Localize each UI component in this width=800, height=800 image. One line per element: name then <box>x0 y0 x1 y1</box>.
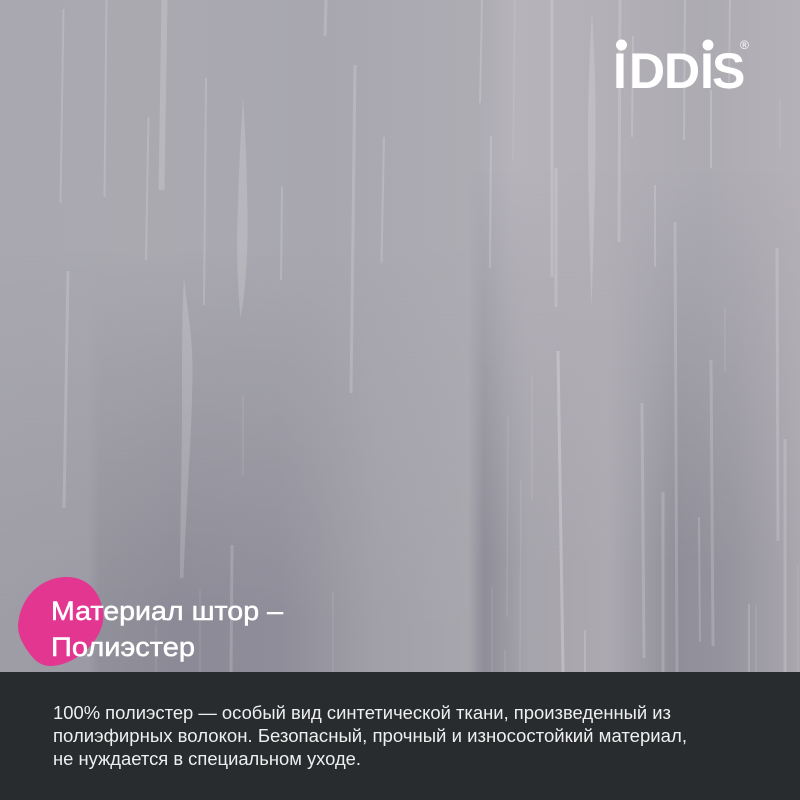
heading: Материал штор – <box>51 596 283 626</box>
description text: 100% полиэстер — особый вид синтетической ткани, произведенный из <box>53 703 671 723</box>
description text: полиэфирных волокон. Безопасный, прочный и износостойкий материал, <box>53 726 687 746</box>
logo wordmark: IDDIS <box>613 43 745 99</box>
panel: description band <box>0 672 800 800</box>
pink blob behind heading <box>18 577 103 666</box>
registered mark: ® <box>740 38 749 52</box>
heading: Полиэстер <box>51 632 195 662</box>
heading <box>51 596 283 662</box>
logo i dots <box>616 40 714 50</box>
description text <box>53 703 687 769</box>
description text: не нуждается в специальном уходе. <box>53 749 361 769</box>
logo: iDDiS <box>613 38 749 99</box>
